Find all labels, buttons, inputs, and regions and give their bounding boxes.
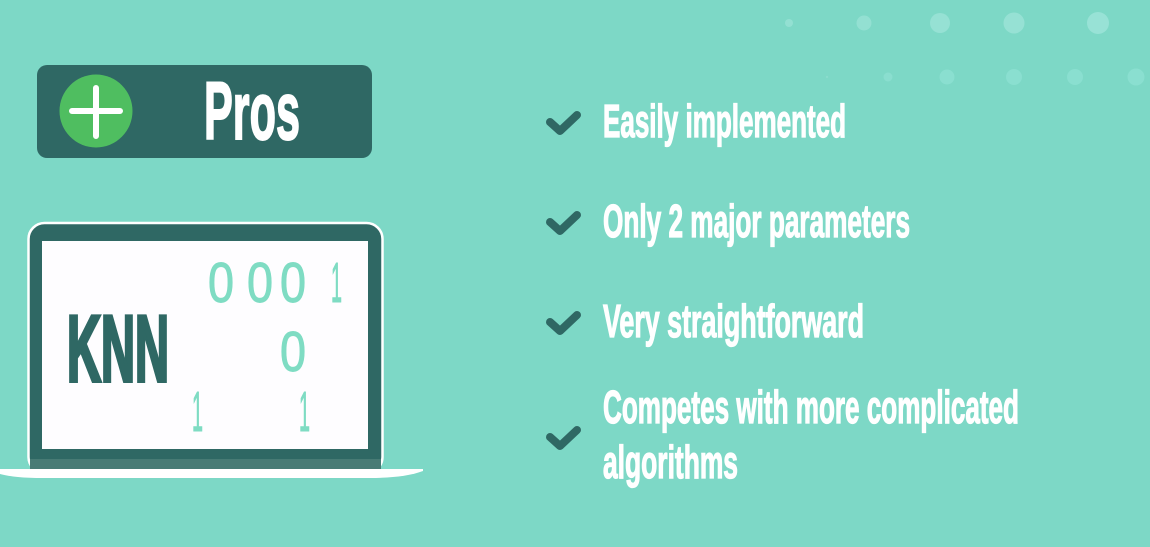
list item: competes with more complicated algorithms <box>550 381 1019 488</box>
list item: very straightforward <box>550 295 864 347</box>
laptop body <box>28 223 382 473</box>
laptop base <box>0 469 423 478</box>
illustration: laptop <box>0 223 423 478</box>
binary digits: 1 <box>192 380 203 444</box>
laptop screen <box>42 241 368 449</box>
decorative dots <box>785 12 1144 86</box>
heading: Pros: Pros <box>204 66 300 157</box>
illustration: laptop: 1 <box>331 251 342 315</box>
binary digits: 0 <box>280 251 306 315</box>
list item: competes with more complicated algorithms: algorithms <box>603 436 738 488</box>
binary digits: 0 <box>280 320 306 384</box>
laptop lower band <box>30 459 381 470</box>
binary digits <box>192 251 342 444</box>
list item: very straightforward: Very straightforward <box>603 295 864 347</box>
list item: only 2 major parameters: Only 2 major parameters <box>603 195 910 247</box>
binary digits: 0 <box>208 251 234 315</box>
icon: green plus <box>60 74 132 148</box>
list item: easily implemented: Easily implemented <box>603 95 846 147</box>
panel: pros heading bar <box>37 65 372 158</box>
binary digits: 0 <box>247 251 273 315</box>
list item: easily implemented <box>550 95 846 147</box>
list item: only 2 major parameters <box>550 195 910 247</box>
screen label: KNN: KNN <box>67 296 169 401</box>
binary digits: 1 <box>299 380 310 444</box>
